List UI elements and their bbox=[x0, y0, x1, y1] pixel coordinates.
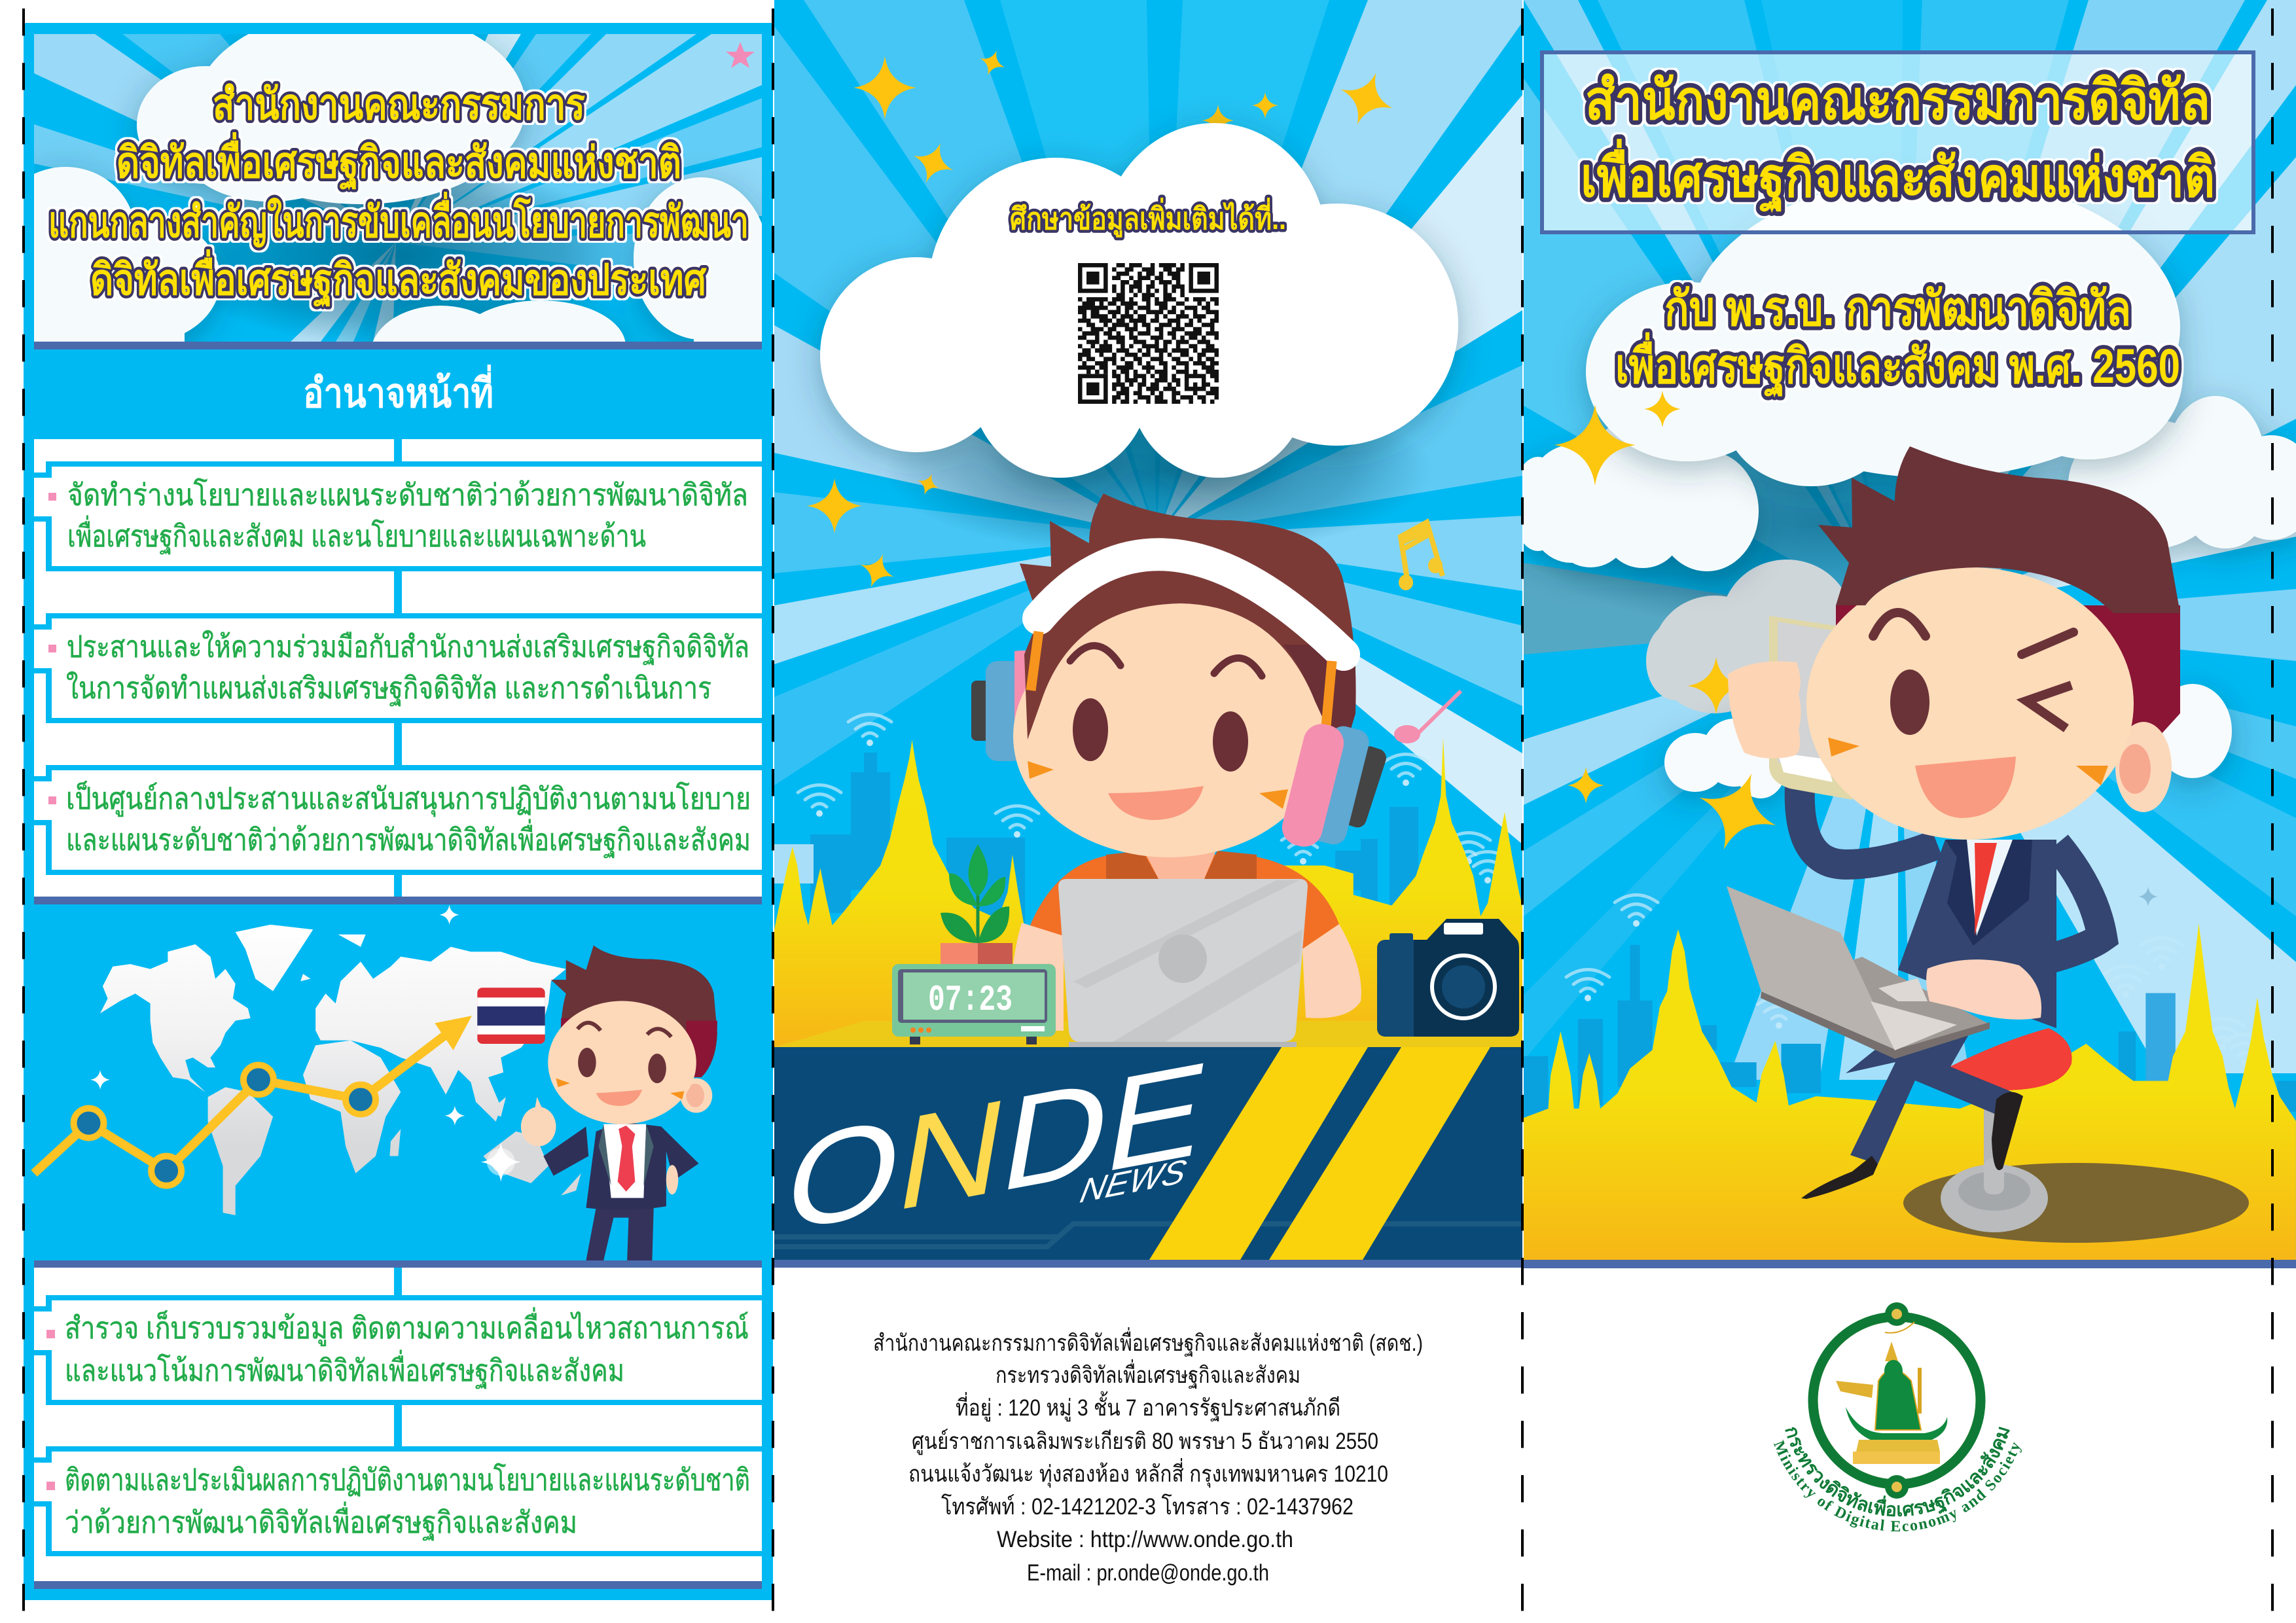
wifi icons bbox=[1566, 895, 2267, 1066]
text: contact address: กระทรวงดิจิทัลเพื่อเศรษฐกิจและสังคม bbox=[996, 1359, 1300, 1389]
icon: digital clock bbox=[892, 964, 1056, 1044]
text: duty 5: ติดตามและประเมินผลการปฏิบัติงานตามนโยบายและแผนระดับชาติ bbox=[65, 1463, 750, 1497]
line chart arrow bbox=[34, 1016, 472, 1186]
small clouds behind bbox=[1646, 560, 1852, 713]
character: pointing businessman bbox=[521, 945, 717, 1260]
icon: camera bbox=[1377, 919, 1519, 1037]
text: duty 1: จัดทำร่างนโยบายและแผนระดับชาติว่าด้วยการพัฒนาดิจิทัล bbox=[67, 478, 748, 512]
character: boy with headphones bbox=[971, 493, 1389, 1031]
text: duty 2 bbox=[66, 630, 749, 706]
character: man with phone and laptop bbox=[1727, 446, 2180, 1232]
ground shadow bbox=[1903, 1163, 2249, 1243]
flag: Thailand bbox=[477, 988, 545, 1044]
arms bbox=[1800, 785, 1937, 865]
banner heading: ดิจิทัลเพื่อเศรษฐกิจและสังคมของประเทศ bbox=[90, 249, 707, 308]
burst background bbox=[774, 0, 1524, 1260]
wifi icons bbox=[798, 715, 1509, 883]
logo: ministry emblem: Ministry of Digital Economy and Society bbox=[1774, 1440, 2022, 1531]
text: contact address: ศูนย์ราชการเฉลิมพระเกียรติ 80 พรรษา 5 ธันวาคม 2550 bbox=[912, 1429, 1378, 1455]
logo: ministry emblem bbox=[1774, 1302, 2022, 1531]
text: contact address: E-mail : pr.onde@onde.go.th bbox=[1027, 1560, 1269, 1586]
cloud with QR code bbox=[820, 123, 1458, 478]
icon: laptop bbox=[1058, 879, 1308, 1047]
heading: subtitle: กับ พ.ร.บ. การพัฒนาดิจิทัล bbox=[1664, 281, 2131, 336]
panel: duties cards bottom bbox=[34, 1268, 762, 1581]
icon: plant bbox=[941, 844, 1013, 964]
panel: duties cards top bbox=[34, 439, 762, 897]
text: duty 4: สำรวจ เก็บรวบรวมข้อมูล ติดตามความเคลื่อนไหวสถานการณ์ bbox=[65, 1307, 749, 1346]
text: duty 4 bbox=[65, 1307, 749, 1389]
skyline city bbox=[774, 753, 1418, 923]
legs bbox=[1846, 1021, 2015, 1164]
text: learn more: ศึกษาข้อมูลเพิ่มเติมได้ที่.. bbox=[1010, 198, 1286, 238]
fist bbox=[1728, 661, 1801, 758]
text: duty 5 bbox=[65, 1463, 750, 1541]
heading: duties: อำนาจหน้าที่ bbox=[303, 365, 493, 416]
text: contact address: สำนักงานคณะกรรมการดิจิทัลเพื่อเศรษฐกิจและสังคมแห่งชาติ (สดช.) bbox=[873, 1327, 1423, 1357]
heading: title: สำนักงานคณะกรรมการดิจิทัล bbox=[1585, 69, 2210, 131]
cloud: big subtitle cloud bbox=[1586, 177, 2183, 486]
sparkles bbox=[90, 905, 521, 1182]
burst background bbox=[1524, 0, 2296, 1080]
skyline city bbox=[1524, 945, 2296, 1118]
icon: digital clock: 07:23 bbox=[928, 979, 1013, 1021]
torso bbox=[1898, 840, 2056, 1028]
heading: subtitle bbox=[1615, 281, 2180, 398]
banner: ONDE NEWS logo bbox=[774, 1032, 1522, 1260]
text: duty 3: และแผนระดับชาติว่าด้วยการพัฒนาดิจิทัลเพื่อเศรษฐกิจและสังคม bbox=[66, 819, 751, 858]
text: duty 1: เพื่อเศรษฐกิจและสังคม และนโยบายและแผนเฉพาะด้าน bbox=[67, 515, 646, 554]
stool bbox=[1941, 1028, 2072, 1232]
panel: cover page bbox=[1524, 0, 2296, 1531]
text: contact address: Website : http://www.onde.go.th bbox=[997, 1527, 1293, 1552]
banner heading: ดิจิทัลเพื่อเศรษฐกิจและสังคมแห่งชาติ bbox=[117, 132, 681, 190]
banner heading bbox=[48, 80, 749, 308]
banner heading: แกนกลางสำคัญในการขับเคลื่อนนโยบายการพัฒนา bbox=[48, 191, 749, 247]
text: duty 5: ว่าด้วยการพัฒนาดิจิทัลเพื่อเศรษฐกิจและสังคม bbox=[65, 1501, 577, 1541]
golden temple skyline bbox=[1524, 923, 2296, 1260]
laptop bbox=[1727, 886, 2041, 1059]
panel: left inner page bbox=[0, 8, 773, 1600]
text: contact address: ถนนแจ้งวัฒนะ ทุ่งสองห้อง หลักสี่ กรุงเทพมหานคร 10210 bbox=[908, 1458, 1388, 1488]
banner: ONDE NEWS logo: ONDE bbox=[775, 1032, 1217, 1260]
banner heading: สำนักงานคณะกรรมการ bbox=[213, 80, 585, 128]
text: duty 1 bbox=[67, 478, 748, 554]
logo: ministry emblem: กระทรวงดิจิทัลเพื่อเศรษฐกิจและสังคม bbox=[1785, 1427, 2010, 1517]
icon: QR code bbox=[1078, 263, 1219, 404]
icon: music notes bbox=[1394, 522, 1461, 743]
header banner with clouds bbox=[34, 34, 762, 342]
phone bbox=[1769, 616, 1852, 800]
heading: title bbox=[1581, 69, 2215, 213]
sparkles bbox=[807, 46, 1402, 594]
text: duty 4: และแนวโน้มการพัฒนาดิจิทัลเพื่อเศรษฐกิจและสังคม bbox=[65, 1349, 624, 1389]
icon: pink star bbox=[726, 42, 755, 68]
world map bbox=[100, 925, 581, 1215]
text: duty 2: ในการจัดทำแผนส่งเสริมเศรษฐกิจดิจิทัล และการดำเนินการ bbox=[66, 671, 711, 706]
text: contact address: โทรศัพท์ : 02-1421202-3 โทรสาร : 02-1437962 bbox=[941, 1493, 1354, 1520]
text: duty 3: เป็นศูนย์กลางประสานและสนับสนุนการปฏิบัติงานตามนโยบาย bbox=[66, 781, 751, 817]
panel: centre page bbox=[774, 0, 1524, 1586]
banner: ONDE NEWS logo: NEWS bbox=[1077, 1152, 1190, 1211]
text: contact address: ที่อยู่ : 120 หมู่ 3 ชั้น 7 อาคารรัฐประศาสนภักดี bbox=[956, 1391, 1340, 1421]
logo text on curve bbox=[1782, 1400, 2013, 1516]
head bbox=[1836, 605, 2180, 743]
text: duty 2: ประสานและให้ความร่วมมือกับสำนักงานส่งเสริมเศรษฐกิจดิจิทัล bbox=[67, 630, 749, 665]
heading: subtitle: เพื่อเศรษฐกิจและสังคม พ.ศ. 2560 bbox=[1615, 332, 2180, 398]
text: duty 3 bbox=[66, 781, 751, 858]
panel: world map with character bbox=[34, 905, 717, 1260]
clouds bbox=[1512, 396, 2296, 571]
golden temple skyline bbox=[774, 738, 1524, 1047]
title box bbox=[1542, 52, 2253, 232]
sparkles bbox=[1554, 391, 2158, 906]
text: contact address bbox=[873, 1327, 1423, 1586]
